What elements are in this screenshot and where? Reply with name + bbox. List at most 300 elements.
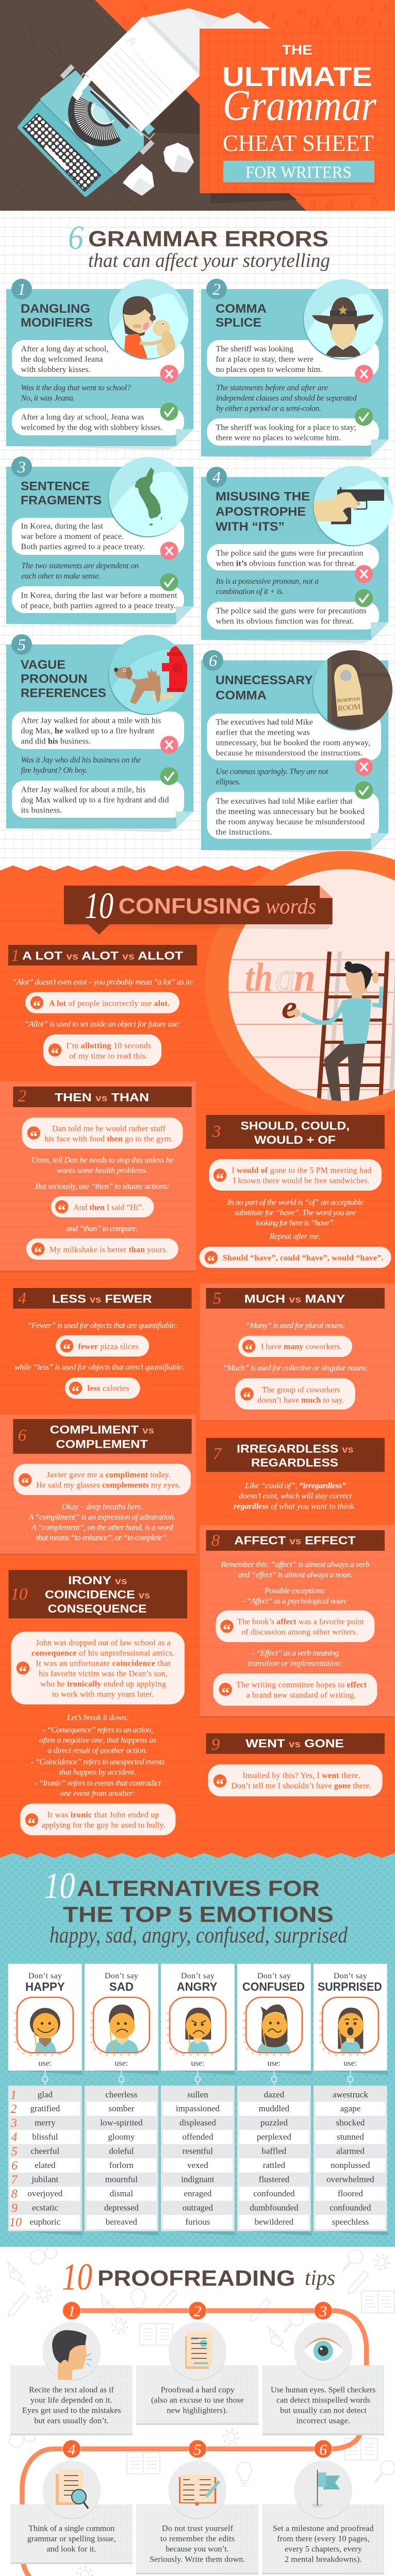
example pill: The group of coworkers bbox=[262, 1385, 340, 1394]
word list: mournful bbox=[105, 2174, 138, 2184]
example pill bbox=[216, 1611, 374, 1642]
word list: jubilant bbox=[31, 2174, 59, 2184]
item 6: compliment vs complement: A “compliment” is an expression of admiration. bbox=[28, 1513, 175, 1521]
tip 2: new highlighters). bbox=[167, 2406, 228, 2415]
correct example bbox=[12, 408, 184, 435]
heading bar: 10 bbox=[10, 1585, 28, 1603]
item 8: affect vs effect: - “Effect” as a verb meaning bbox=[252, 1649, 339, 1657]
word list: gloomy bbox=[108, 2132, 135, 2142]
wrong example: and did his business. bbox=[21, 737, 91, 745]
faint letters bbox=[121, 0, 389, 212]
example pill: Dan told me he would rather stuff bbox=[52, 1124, 166, 1133]
item 10: irony vs coincidence vs consequence: Let’s break it down: bbox=[67, 1713, 129, 1722]
wrong example: the dog welcomed Jeana bbox=[21, 355, 103, 364]
tip 1: Eyes get used to the mistakes bbox=[22, 2406, 121, 2415]
example pill: his face with food then go to the gym. bbox=[44, 1134, 173, 1143]
card title: DANGLING bbox=[21, 302, 90, 316]
column: angry: use: bbox=[191, 2059, 204, 2067]
example pill: “ bbox=[216, 1170, 224, 1188]
item 4: less vs fewer: while “less” is used for objects that aren’t quantifiable: bbox=[14, 1363, 185, 1371]
heading bar: IRONY vs bbox=[68, 1574, 127, 1587]
tip 6 bbox=[262, 2440, 384, 2574]
wrong example: when it’s obvious function was for threat. bbox=[216, 559, 356, 568]
card title: APOSTROPHE bbox=[216, 505, 306, 519]
number 6: 6 bbox=[209, 651, 217, 670]
item 2: then vs than: But seriously, use “then” to situate actions: bbox=[35, 1182, 170, 1191]
tip 3: Use human eyes. Spell checkers bbox=[271, 2385, 375, 2394]
card title bbox=[21, 658, 106, 700]
heading bar: 8 bbox=[211, 1532, 220, 1550]
explanation: Was it the dog that went to school? bbox=[21, 383, 131, 393]
banner: 10 confusing words: CONFUSING bbox=[119, 894, 261, 919]
section: proofreading tips bbox=[0, 2247, 395, 2576]
word list: vexed bbox=[187, 2160, 208, 2170]
title text: Grammar bbox=[223, 81, 377, 130]
column: happy: use: bbox=[39, 2059, 52, 2067]
correct example: the instructions. bbox=[216, 828, 272, 837]
wrong example bbox=[207, 714, 381, 760]
wrong example: with slobbery kisses. bbox=[21, 365, 91, 374]
folded corner bbox=[176, 606, 193, 624]
example pill: Should “have”, could “have”, would “have”. bbox=[223, 1254, 384, 1263]
wrong example: war before a moment of peace. bbox=[21, 532, 124, 541]
faint letters: b bbox=[383, 1, 389, 16]
wrong example: no places open to welcome him. bbox=[216, 365, 322, 374]
word list: dazed bbox=[264, 2090, 285, 2099]
heading bar: CONSEQUENCE bbox=[48, 1602, 146, 1615]
card title bbox=[216, 673, 313, 703]
icon: speaking man bbox=[43, 2322, 101, 2380]
illustration: sheriff bbox=[302, 278, 385, 361]
example pill: “ bbox=[30, 1127, 38, 1145]
heading bar: 1 bbox=[11, 946, 20, 965]
icon: open book with pencil bbox=[169, 2461, 226, 2519]
illustration: man on ladder fixing than bbox=[205, 851, 395, 1115]
title text: THE bbox=[282, 42, 312, 58]
title text: ULTIMATE bbox=[222, 62, 372, 92]
panel: 3 sentence fragments bbox=[6, 455, 193, 628]
example pill: He said my glasses complements my eyes. bbox=[36, 1481, 180, 1490]
folded corner bbox=[176, 811, 193, 828]
item 3: should could would of: In no part of the world is “of” an acceptable bbox=[227, 1198, 364, 1207]
tip 6: every 5 chapters, every bbox=[285, 2545, 362, 2553]
number 5: 5 bbox=[194, 2441, 201, 2459]
correct example: welcomed by the dog with slobbery kisses. bbox=[21, 423, 163, 432]
example pill: to work with many years later. bbox=[52, 1690, 154, 1699]
title text bbox=[222, 42, 377, 156]
explanation: each other to make sense. bbox=[22, 572, 101, 581]
item 7: irregardless vs regardless bbox=[206, 1438, 385, 1511]
heading: 6 grammar errors: GRAMMAR ERRORS bbox=[88, 227, 328, 251]
correct example bbox=[207, 602, 379, 630]
explanation: ellipses. bbox=[216, 777, 240, 786]
illustration: reserved room door hanger bbox=[311, 649, 395, 731]
word list: flustered bbox=[259, 2174, 290, 2184]
faint letters: v bbox=[285, 15, 291, 30]
icon: wrong bbox=[355, 758, 373, 776]
word list: rattled bbox=[263, 2160, 286, 2170]
correct example bbox=[207, 792, 379, 839]
heading bar bbox=[206, 1733, 385, 1754]
folded corner bbox=[371, 833, 388, 850]
word list: bereaved bbox=[106, 2217, 138, 2227]
faint letters: ? bbox=[324, 3, 331, 18]
icon: wrong bbox=[160, 365, 178, 383]
heading bar: AFFECT vs EFFECT bbox=[234, 1534, 356, 1547]
heading bar: 3 bbox=[212, 1123, 221, 1141]
example pill: “ bbox=[245, 1341, 253, 1359]
card title: PRONOUN bbox=[21, 672, 88, 686]
item 5: much vs many: “Many” is used for plural nouns: bbox=[245, 1321, 345, 1330]
heading bar: REGARDLESS bbox=[251, 1456, 338, 1469]
number 5 bbox=[189, 2440, 206, 2459]
tip 6: 2 mental breakdowns). bbox=[285, 2555, 361, 2564]
example pill: My milkshake is better than yours. bbox=[50, 1245, 168, 1254]
item 1: a lot vs alot vs allot: “Alot” doesn’t even exist – you probably mean “a lot” as in: bbox=[12, 978, 194, 987]
column: surprised: SURPRISED bbox=[318, 1980, 382, 1993]
faint letters: a bbox=[248, 1, 254, 15]
icon: correct bbox=[160, 767, 178, 785]
heading: 10 proofreading tips: PROOFREADING bbox=[97, 2266, 295, 2291]
word list: ecstatic bbox=[32, 2203, 58, 2212]
explanation bbox=[21, 756, 141, 775]
number 3: 3 bbox=[319, 2303, 327, 2320]
example pill bbox=[25, 992, 179, 1015]
icon: eye bbox=[294, 2322, 352, 2380]
number 4: 4 bbox=[212, 468, 221, 486]
column: confused: CONFUSED bbox=[242, 1980, 305, 1993]
heading: 10 proofreading tips: 10 bbox=[62, 2256, 92, 2298]
illustration: reserved room door hanger: ROOM bbox=[338, 703, 361, 713]
item 10: irony vs coincidence vs consequence: - “Coincidence” refers to unexpected events bbox=[31, 1757, 164, 1766]
tip 3 bbox=[262, 2302, 384, 2435]
heading bar bbox=[9, 1570, 187, 1618]
word list: muddled bbox=[259, 2104, 290, 2113]
word: than: th bbox=[245, 955, 273, 999]
wrong example bbox=[207, 340, 379, 377]
heading bar: A LOT vs ALOT vs ALLOT bbox=[22, 950, 183, 962]
correct example bbox=[12, 781, 184, 818]
word list: shocked bbox=[336, 2117, 365, 2128]
word list: furious bbox=[185, 2217, 210, 2227]
item 4: less vs fewer: “Fewer” is used for objects that are quantifiable: bbox=[27, 1321, 177, 1330]
tip 2: Proofread a hard copy bbox=[161, 2385, 235, 2394]
heading bar bbox=[206, 1530, 385, 1551]
illustration: hand with gun bbox=[312, 465, 394, 547]
wrong example: because he misunderstood the instructions. bbox=[216, 749, 363, 758]
word list: resentful bbox=[183, 2146, 213, 2156]
word list: confounded bbox=[330, 2203, 371, 2212]
example pill bbox=[65, 1378, 140, 1400]
heading bar bbox=[13, 1288, 192, 1309]
word list: confounded bbox=[253, 2189, 295, 2198]
tip 5: Seriously. Write them down. bbox=[150, 2555, 245, 2564]
correct example bbox=[12, 586, 184, 613]
number 2 bbox=[206, 279, 227, 299]
heading bar: WENT vs GONE bbox=[245, 1737, 344, 1750]
correct example: The executives had told Mike earlier that bbox=[216, 797, 353, 806]
tip 4: Think of a single common bbox=[28, 2524, 114, 2533]
example pill bbox=[11, 1632, 185, 1704]
correct example: After Jay walked for about a mile, his bbox=[21, 785, 145, 794]
correct example: the meeting was unnecessary but he booked bbox=[216, 807, 365, 816]
column: surprised bbox=[314, 1964, 388, 2235]
number 3: 3 bbox=[17, 457, 26, 476]
tip 4: and look for it. bbox=[46, 2545, 96, 2553]
item 4: less vs fewer bbox=[13, 1288, 192, 1400]
number 5: 5 bbox=[18, 635, 26, 654]
section: grammar errors bbox=[0, 211, 395, 870]
explanation bbox=[216, 767, 328, 786]
wrong example: After Jay walked for about a mile with his bbox=[21, 716, 161, 725]
example pill: I known there would be free sandwiches. bbox=[233, 1177, 370, 1185]
faint letters: O bbox=[356, 14, 366, 29]
heading bar bbox=[206, 1115, 385, 1149]
item 9: went vs gone bbox=[206, 1733, 385, 1797]
example pill: doesn’t have much to say. bbox=[257, 1396, 344, 1404]
title text: CHEAT SHEET bbox=[223, 130, 374, 156]
section: confusing words bbox=[0, 851, 395, 1858]
example pill: consequence of his unprofessional antics. bbox=[31, 1649, 174, 1657]
word list: stunned bbox=[337, 2132, 364, 2142]
correct example: of peace, both parties agreed to a peace treaty. bbox=[21, 602, 176, 611]
card title: UNNECESSARY bbox=[216, 673, 313, 687]
icon: highlighted document bbox=[169, 2322, 226, 2380]
example pill bbox=[26, 1239, 178, 1261]
example pill: “ bbox=[216, 1775, 224, 1793]
title panel bbox=[200, 29, 395, 193]
word list: alarmed bbox=[336, 2146, 365, 2156]
heading: 10 proofreading tips: tips bbox=[305, 2266, 335, 2290]
word: than: n bbox=[294, 955, 316, 999]
word: than: e bbox=[282, 990, 297, 1025]
heading bar: 2 bbox=[18, 1087, 26, 1106]
word list: agape bbox=[340, 2104, 360, 2113]
item 7: irregardless vs regardless: regardless of what you want to think. bbox=[234, 1502, 356, 1511]
word list: cheerless bbox=[105, 2090, 138, 2099]
number 5 bbox=[11, 634, 32, 655]
explanation bbox=[22, 562, 139, 581]
word list bbox=[314, 2086, 387, 2231]
example pill: “ bbox=[221, 1684, 229, 1702]
word list: overwhelmed bbox=[326, 2174, 374, 2184]
example pill: “ bbox=[33, 997, 41, 1015]
example pill: “ bbox=[207, 1252, 215, 1270]
column: sad bbox=[85, 1964, 159, 2235]
item 1: a lot vs alot vs allot bbox=[8, 945, 197, 1066]
item 6: compliment vs complement: A “complement”, on the other hand, is a word bbox=[31, 1523, 174, 1532]
wrong example: The police said the guns were for precaution bbox=[216, 549, 363, 557]
faint letters: U bbox=[121, 14, 132, 29]
correct example: there were no places to welcome him. bbox=[216, 434, 341, 442]
portrait bbox=[168, 1997, 226, 2055]
item 10: irony vs coincidence vs consequence: one event from another: bbox=[60, 1789, 136, 1798]
example pill bbox=[235, 1378, 355, 1410]
word list: enraged bbox=[184, 2189, 212, 2198]
wrong example: The sheriff was looking bbox=[216, 345, 293, 353]
word list: cheerful bbox=[31, 2146, 60, 2156]
item 10: irony vs coincidence vs consequence: a direct result of another action. bbox=[47, 1747, 147, 1755]
heading bar: MUCH vs MANY bbox=[244, 1293, 345, 1306]
heading: 10 alternatives: 10 bbox=[44, 1865, 75, 1906]
panel: 1 dangling modifiers bbox=[6, 278, 193, 450]
heading: 10 alternatives: THE TOP 5 EMOTIONS bbox=[63, 1903, 334, 1927]
word: than: a bbox=[275, 955, 295, 999]
item 7: irregardless vs regardless: Like “could of”, “irregardless” bbox=[244, 1481, 346, 1490]
tip 1: your life depended on it. bbox=[30, 2396, 112, 2404]
explanation: Its is a possessive pronoun, not a bbox=[216, 577, 319, 586]
folded corner bbox=[176, 429, 193, 446]
example pill: I would of gone to the 5 PM meeting had bbox=[232, 1166, 371, 1175]
item 2: then vs than: and “than” to compare: bbox=[67, 1224, 138, 1233]
illustration: reserved room door hanger: RESERVED bbox=[337, 696, 360, 703]
word list: merry bbox=[35, 2117, 56, 2128]
correct example: dog Max walked up to a fire hydrant and did bbox=[21, 795, 169, 804]
heading bar: IRREGARDLESS vs bbox=[237, 1442, 353, 1455]
tip 5: to remember the edits bbox=[160, 2534, 235, 2543]
wrong example: unnecessary, but he booked the room anyway, bbox=[216, 739, 370, 748]
correct example bbox=[207, 418, 379, 446]
heading bar: 9 bbox=[211, 1736, 220, 1754]
word list: 5 bbox=[11, 2145, 18, 2159]
heading bar: THEN vs THAN bbox=[55, 1091, 149, 1104]
example pill: I’m allotting 10 seconds bbox=[66, 1041, 151, 1050]
correct example: its business. bbox=[21, 806, 62, 815]
sheet of paper bbox=[85, 8, 271, 132]
item 3: should could would of bbox=[199, 1115, 391, 1270]
icon: correct bbox=[355, 781, 373, 800]
word list: forlorn bbox=[109, 2160, 134, 2170]
number 2 bbox=[189, 2302, 206, 2320]
number 4 bbox=[63, 2440, 80, 2459]
connector bbox=[271, 2071, 276, 2086]
number 6: 6 bbox=[319, 2441, 327, 2459]
example pill: “ bbox=[28, 1814, 36, 1832]
tip 2: (also an excuse to use those bbox=[151, 2396, 244, 2404]
section: emotion alternatives bbox=[0, 1853, 395, 2247]
item 10: irony vs coincidence vs consequence: that happen by accident. bbox=[59, 1768, 136, 1776]
tip 4: grammar or spelling issue, bbox=[27, 2534, 116, 2543]
word list: displeased bbox=[179, 2117, 216, 2128]
word list: doleful bbox=[109, 2146, 134, 2156]
tip 1: but ears usually don’t. bbox=[34, 2416, 109, 2425]
band: for writers: FOR WRITERS bbox=[245, 163, 352, 182]
example pill: “ bbox=[19, 1663, 27, 1681]
heading bar: COINCIDENCE vs bbox=[45, 1588, 150, 1601]
wrong example: In Korea, during the last bbox=[21, 522, 104, 531]
connector bbox=[195, 2071, 200, 2086]
number 2: 2 bbox=[194, 2303, 201, 2320]
tip 3: can detect misspelled words bbox=[276, 2396, 370, 2404]
number 6 bbox=[203, 650, 223, 671]
faint letters: q bbox=[309, 195, 316, 210]
example pill bbox=[20, 1804, 175, 1835]
connector bbox=[119, 2071, 124, 2086]
example pill: a brand new standard of writing. bbox=[246, 1691, 356, 1700]
banner: 10 confusing words: 10 bbox=[85, 885, 113, 926]
banner: 10 confusing words bbox=[64, 885, 333, 935]
heading bar bbox=[13, 1087, 192, 1107]
panel: 6 unnecessary comma bbox=[201, 649, 395, 854]
example pill: “ bbox=[34, 1243, 42, 1261]
column: sad: SAD bbox=[109, 1980, 134, 1993]
word list: puzzled bbox=[260, 2117, 288, 2128]
icon: correct bbox=[355, 408, 373, 426]
word list: 4 bbox=[11, 2131, 18, 2144]
tip 1 bbox=[10, 2302, 133, 2435]
icon: wrong bbox=[160, 736, 178, 754]
word list: depressed bbox=[104, 2203, 139, 2212]
typewriter bbox=[20, 66, 155, 195]
explanation bbox=[216, 577, 319, 596]
word list: elated bbox=[35, 2160, 56, 2170]
card title bbox=[216, 490, 310, 534]
faint letters: h bbox=[371, 193, 378, 208]
tip 3: incorrect usage. bbox=[296, 2416, 350, 2425]
word list: blissful bbox=[32, 2132, 58, 2142]
card title bbox=[216, 302, 267, 330]
explanation bbox=[216, 383, 357, 413]
card title bbox=[21, 480, 102, 507]
word list: nonplussed bbox=[331, 2160, 370, 2170]
word list: outraged bbox=[183, 2203, 213, 2212]
card title: MISUSING THE bbox=[216, 490, 310, 504]
connector bbox=[42, 2071, 47, 2086]
heading bar bbox=[8, 945, 197, 965]
wrong example: Both parties agreed to a peace treaty. bbox=[21, 543, 145, 551]
number 2: 2 bbox=[212, 280, 221, 298]
example pill: It was ironic that John ended up bbox=[47, 1810, 159, 1819]
item 3: should could would of: substitute for “have”. The word you are bbox=[234, 1208, 356, 1217]
item 1: a lot vs alot vs allot: “Allot” is used to set aside an object for future use: bbox=[24, 1020, 181, 1029]
word list bbox=[85, 2086, 158, 2231]
word list: 10 bbox=[9, 2216, 22, 2229]
faint letters: f bbox=[218, 6, 223, 21]
faint letters: z bbox=[270, 8, 276, 23]
crumpled paper balls bbox=[123, 143, 194, 196]
word list: glad bbox=[38, 2090, 53, 2099]
number 3 bbox=[314, 2302, 332, 2320]
example pill: “ bbox=[72, 1382, 79, 1400]
column: surprised: use: bbox=[344, 2059, 357, 2067]
wrong example bbox=[12, 518, 184, 555]
heading bar: COMPLEMENT bbox=[56, 1438, 148, 1451]
tip 5: Do not trust yourself bbox=[162, 2524, 234, 2533]
correct example: The police said the guns were for precautions bbox=[216, 607, 366, 616]
tip 1: Recite the text aloud as if bbox=[29, 2385, 114, 2394]
icon: correct bbox=[160, 403, 178, 420]
wrong example: The executives had told Mike bbox=[216, 718, 313, 727]
sheet of paper: A bbox=[124, 33, 140, 49]
card title: FRAGMENTS bbox=[21, 494, 102, 507]
heading bar bbox=[206, 1438, 385, 1472]
faint letters: d bbox=[326, 197, 333, 212]
word list: indignant bbox=[181, 2174, 215, 2184]
icon: wrong bbox=[355, 565, 373, 583]
example pill: A lot of people incorrectly use alot. bbox=[49, 999, 170, 1008]
word list: overjoyed bbox=[27, 2189, 63, 2198]
word list bbox=[237, 2086, 311, 2231]
illustration: dog and fire hydrant bbox=[107, 633, 190, 716]
faint letters: Q bbox=[309, 14, 319, 29]
example pill: It was an unfortunate coincidence that bbox=[36, 1659, 171, 1668]
icon: document and magnifier bbox=[43, 2461, 101, 2519]
item 8: affect vs effect: Possible exceptions: bbox=[264, 1587, 326, 1596]
explanation bbox=[21, 383, 131, 403]
example pill: The writing committee hopes to effect bbox=[236, 1681, 367, 1689]
example pill: of my time to read this. bbox=[69, 1052, 147, 1060]
portrait bbox=[244, 1997, 302, 2055]
